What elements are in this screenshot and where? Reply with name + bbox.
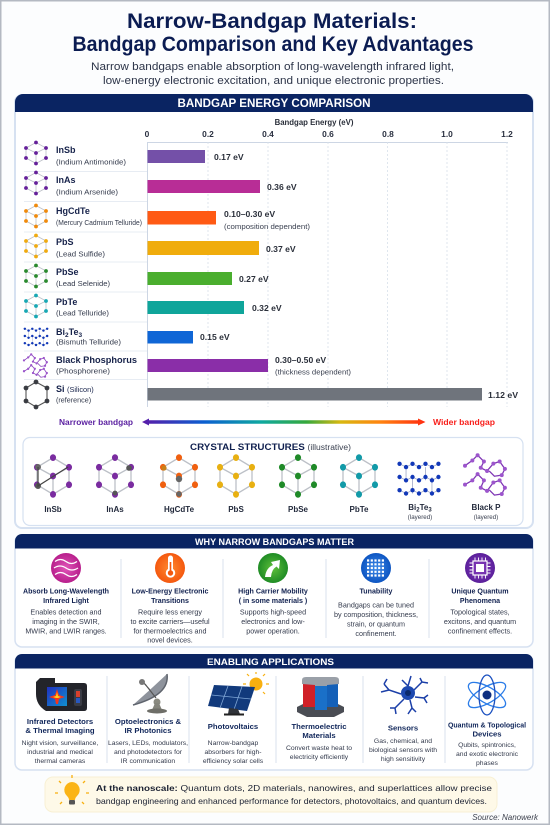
icon: thermometer — [155, 553, 185, 583]
row: PbTe: PbTe — [56, 297, 77, 307]
item: quantum and topological devices: and exotic electronic — [456, 751, 519, 758]
item: thermoelectric materials: electricity efficiently — [290, 754, 349, 761]
item: low-energy electronic transitions: to excite carriers—useful — [130, 617, 210, 626]
bar chart — [23, 118, 518, 409]
item: unique quantum phenomena — [444, 553, 516, 636]
crystal: HgCdTe: HgCdTe — [164, 505, 195, 514]
item: absorb long-wavelength infrared light: imaging in the SWIR, — [32, 617, 100, 626]
title: Bandgap Comparison and Key Advantages — [72, 32, 474, 56]
crystal: PbS — [217, 454, 255, 514]
item: tunability: Bandgaps can be tuned — [338, 600, 414, 610]
narrower to wider bandgap arrow — [59, 418, 495, 427]
item: absorb long-wavelength infrared light: Enables detection and — [30, 608, 102, 616]
panel header: enabling applications — [15, 654, 533, 668]
row: InSb: (Indium Antimonide) — [56, 158, 126, 166]
row: PbSe — [24, 264, 269, 288]
subtitle: Narrow bandgaps enable absorption of long-wavelength infrared light, — [91, 61, 454, 73]
crystal: PbSe — [279, 454, 317, 514]
row: PbTe: (Lead Telluride) — [56, 308, 109, 318]
item: absorb long-wavelength infrared light — [23, 553, 109, 636]
row: HgCdTe: HgCdTe — [56, 206, 90, 216]
item: tunability: strain, or quantum — [347, 620, 405, 628]
row: PbS: PbS — [56, 237, 74, 247]
icon: thermoelectric module — [297, 677, 344, 717]
icon: light bulb — [55, 775, 89, 804]
panel header: why narrow bandgaps matter — [15, 534, 533, 548]
item: high carrier mobility: Supports high-speed — [240, 608, 306, 616]
row: PbSe: 0.27 eV — [239, 274, 269, 284]
row: PbTe — [24, 294, 282, 318]
item: sensors — [369, 676, 437, 763]
row: Silicon reference: (reference) — [56, 396, 91, 404]
row: Black Phosphorus: (Phosphorene) — [56, 366, 110, 376]
title — [72, 9, 474, 56]
item: thermoelectric materials: Thermoelectric — [291, 722, 347, 731]
subtitle: low-energy electronic excitation, and unique electronic properties. — [103, 75, 444, 87]
item: sensors: high sensitivity — [381, 756, 426, 763]
axis ticks: 0.8 — [382, 129, 394, 139]
panel: crystal structures — [23, 438, 523, 526]
row: PbTe: 0.32 eV — [252, 303, 282, 313]
item: unique quantum phenomena: Topological states, — [450, 608, 510, 616]
item: sensors: biological sensors with — [369, 747, 437, 754]
item: quantum and topological devices: Qubits, spintronics, — [458, 742, 516, 749]
row: HgCdTe: 0.10–0.30 eV — [224, 209, 275, 219]
crystal: Bi2Te3: Te — [420, 503, 429, 512]
item: quantum and topological devices: phases — [476, 760, 499, 767]
crystal: Black P: (layered) — [474, 514, 498, 521]
crystal: Black P: Black P — [472, 503, 501, 512]
row: PbS — [24, 234, 296, 258]
crystal: PbTe — [340, 454, 378, 514]
row: InSb: InSb — [56, 145, 76, 155]
item: unique quantum phenomena: Phenomena — [460, 597, 500, 605]
axis ticks: 0.4 — [262, 129, 274, 139]
icon: thermal camera — [36, 678, 87, 711]
icon: satellite dish — [133, 674, 167, 714]
item: photovoltaics: Photovoltaics — [208, 722, 258, 731]
callout text: bandgap engineering and enhanced performance for detectors, photovoltaics, and quantum devices. — [96, 796, 487, 806]
row: Black Phosphorus — [23, 353, 351, 378]
item: high carrier mobility: ( in some materials ) — [239, 597, 308, 605]
item: low-energy electronic transitions: for thermoelectrics and — [133, 626, 207, 636]
item: quantum and topological devices: Devices — [472, 730, 502, 738]
item: low-energy electronic transitions: novel devices. — [147, 636, 193, 644]
row: InAs: 0.36 eV — [267, 182, 297, 192]
panel: enabling applications — [15, 654, 533, 770]
item: tunability: by composition, thickness, — [334, 610, 418, 619]
crystal: Black P — [463, 453, 507, 521]
item: infrared detectors and thermal imaging: Infrared Detectors — [27, 717, 93, 726]
item: low-energy electronic transitions: Low-Energy Electronic — [132, 588, 208, 596]
row: HgCdTe — [24, 204, 310, 231]
item: photovoltaics: Narrow-bandgap — [208, 740, 259, 747]
row: Bi2Te3 — [24, 327, 230, 346]
row: Silicon reference — [24, 380, 518, 409]
item: high carrier mobility: High Carrier Mobility — [238, 588, 308, 596]
icon: dot grid — [361, 553, 391, 583]
item: high carrier mobility: electronics and low- — [241, 617, 305, 626]
row: Bi2Te3: 3 — [78, 332, 82, 339]
icon: chip — [465, 553, 495, 583]
narrower to wider bandgap arrow: Narrower bandgap — [59, 418, 133, 427]
row: Bi2Te3: Bi — [56, 327, 65, 337]
axis ticks: 1.0 — [441, 129, 453, 139]
callout: at the nanoscale — [45, 775, 497, 812]
item: optoelectronics and IR photonics: Optoelectronics & — [115, 717, 182, 726]
item: optoelectronics and IR photonics: IR communication — [121, 758, 175, 765]
crystal: Bi2Te3: (layered) — [408, 514, 432, 521]
item: infrared detectors and thermal imaging: industrial and medical — [27, 749, 93, 756]
item: infrared detectors and thermal imaging: & Thermal Imaging — [25, 726, 95, 735]
row: Silicon reference: 1.12 eV — [488, 390, 518, 400]
row: Silicon reference: Si (Silicon) — [56, 384, 94, 394]
crystal: InAs: InAs — [106, 505, 124, 514]
item: high carrier mobility — [238, 553, 308, 636]
item: absorb long-wavelength infrared light: Absorb Long-Wavelength — [23, 588, 109, 596]
crystal structures heading: CRYSTAL STRUCTURES (illustrative) — [190, 442, 351, 452]
item: tunability: confinement. — [355, 629, 397, 638]
row: Black Phosphorus: Black Phosphorus — [56, 355, 137, 365]
row: HgCdTe: (composition dependent) — [224, 222, 310, 231]
panel header: bandgap energy comparison — [15, 94, 533, 112]
axis ticks — [145, 129, 513, 407]
axis ticks: 1.2 — [501, 129, 513, 139]
item: low-energy electronic transitions: Transitions — [151, 597, 189, 605]
item: thermoelectric materials — [286, 677, 352, 761]
row: PbSe: (Lead Selenide) — [56, 279, 110, 288]
panel header: enabling applications: ENABLING APPLICATIONS — [207, 657, 334, 668]
row: InSb — [24, 141, 244, 166]
row: Black Phosphorus: 0.30–0.50 eV — [275, 355, 326, 365]
panel: bandgap energy comparison — [15, 94, 533, 528]
crystal: HgCdTe — [160, 454, 198, 514]
item: photovoltaics — [203, 672, 269, 765]
item: low-energy electronic transitions — [130, 553, 210, 644]
panel: why narrow bandgaps matter — [15, 534, 533, 647]
icon: upward arrow — [258, 553, 288, 583]
item: sensors: Gas, chemical, and — [374, 738, 432, 745]
row: Bi2Te3: (Bismuth Telluride) — [56, 338, 121, 346]
crystal: Bi2Te3: Bi — [408, 503, 416, 512]
item: photovoltaics: absorbers for high- — [204, 749, 262, 756]
axis ticks: 0.2 — [202, 129, 214, 139]
item: high carrier mobility: power operation. — [246, 626, 300, 636]
item: low-energy electronic transitions: Require less energy — [138, 608, 202, 616]
subtitle — [91, 61, 454, 87]
icon: solar panel and sun — [208, 672, 269, 716]
panel header: why narrow bandgaps matter: WHY NARROW BANDGAPS MATTER — [195, 537, 354, 548]
callout text: At the nanoscale: Quantum dots, 2D materials, nanowires, and superlattices allow precise — [96, 783, 492, 793]
axis ticks: 0.6 — [322, 129, 334, 139]
narrower to wider bandgap arrow: Wider bandgap — [433, 418, 495, 427]
crystal: PbS: PbS — [228, 505, 244, 514]
row: PbS: (Lead Sulfide) — [56, 250, 105, 258]
row: InSb: 0.17 eV — [214, 152, 244, 162]
item: photovoltaics: efficiency solar cells — [203, 758, 264, 765]
item: infrared detectors and thermal imaging — [22, 678, 98, 765]
item: absorb long-wavelength infrared light: MWIR, and LWIR ranges. — [25, 626, 107, 636]
row: Bi2Te3: 0.15 eV — [200, 332, 230, 342]
item: tunability — [334, 553, 418, 638]
row: Black Phosphorus: (thickness dependent) — [275, 368, 351, 376]
crystal: Bi2Te3 — [397, 462, 441, 521]
panel header: bandgap energy comparison: BANDGAP ENERGY COMPARISON — [178, 98, 370, 110]
item: thermoelectric materials: Convert waste heat to — [286, 745, 352, 752]
item: thermoelectric materials: Materials — [302, 731, 336, 740]
crystal: Bi2Te3: 2 — [416, 508, 420, 514]
item: quantum and topological devices: Quantum & Topological — [448, 720, 526, 730]
crystal: PbTe: PbTe — [350, 505, 369, 514]
icon: infrared waves — [51, 553, 81, 583]
item: tunability: Tunability — [360, 588, 393, 596]
item: quantum and topological devices — [448, 675, 526, 767]
row: InAs: (Indium Arsenide) — [56, 188, 118, 196]
row: PbSe: PbSe — [56, 267, 79, 277]
icon: atom — [465, 675, 509, 715]
item: infrared detectors and thermal imaging: Night vision, surveillance, — [22, 740, 98, 747]
item: absorb long-wavelength infrared light: Infrared Light — [43, 597, 89, 605]
item: optoelectronics and IR photonics: IR Photonics — [125, 726, 171, 735]
item: optoelectronics and IR photonics: and photodetectors for — [114, 749, 183, 756]
crystal: InAs — [96, 454, 134, 514]
row: Bi2Te3: 2 — [65, 332, 69, 339]
row: InAs: InAs — [56, 175, 76, 185]
title: Narrow-Bandgap Materials: — [127, 9, 417, 33]
crystal: PbSe: PbSe — [288, 505, 309, 514]
item: unique quantum phenomena: confinement effects. — [448, 626, 512, 636]
item: unique quantum phenomena: excitons, and quantum — [444, 617, 516, 626]
item: infrared detectors and thermal imaging: thermal cameras — [35, 758, 86, 765]
item: sensors: Sensors — [388, 724, 418, 732]
crystal: InSb: InSb — [44, 505, 62, 514]
callout text — [96, 783, 492, 806]
axis ticks: 0 — [145, 129, 150, 139]
axis title: Bandgap Energy (eV) — [275, 118, 354, 127]
row: PbS: 0.37 eV — [266, 244, 296, 254]
row: HgCdTe: (Mercury Cadmium Telluride) — [56, 218, 142, 227]
crystal: Bi2Te3: 3 — [428, 508, 432, 514]
item: optoelectronics and IR photonics — [108, 674, 188, 765]
item: optoelectronics and IR photonics: Lasers, LEDs, modulators, — [108, 740, 188, 747]
source credit: Source: Nanowerk — [472, 813, 539, 822]
crystal: InSb — [34, 454, 72, 514]
row: Bi2Te3: Te — [69, 327, 78, 337]
item: unique quantum phenomena: Unique Quantum — [451, 588, 509, 596]
icon: neuron — [381, 676, 428, 714]
row: InAs — [24, 171, 297, 196]
